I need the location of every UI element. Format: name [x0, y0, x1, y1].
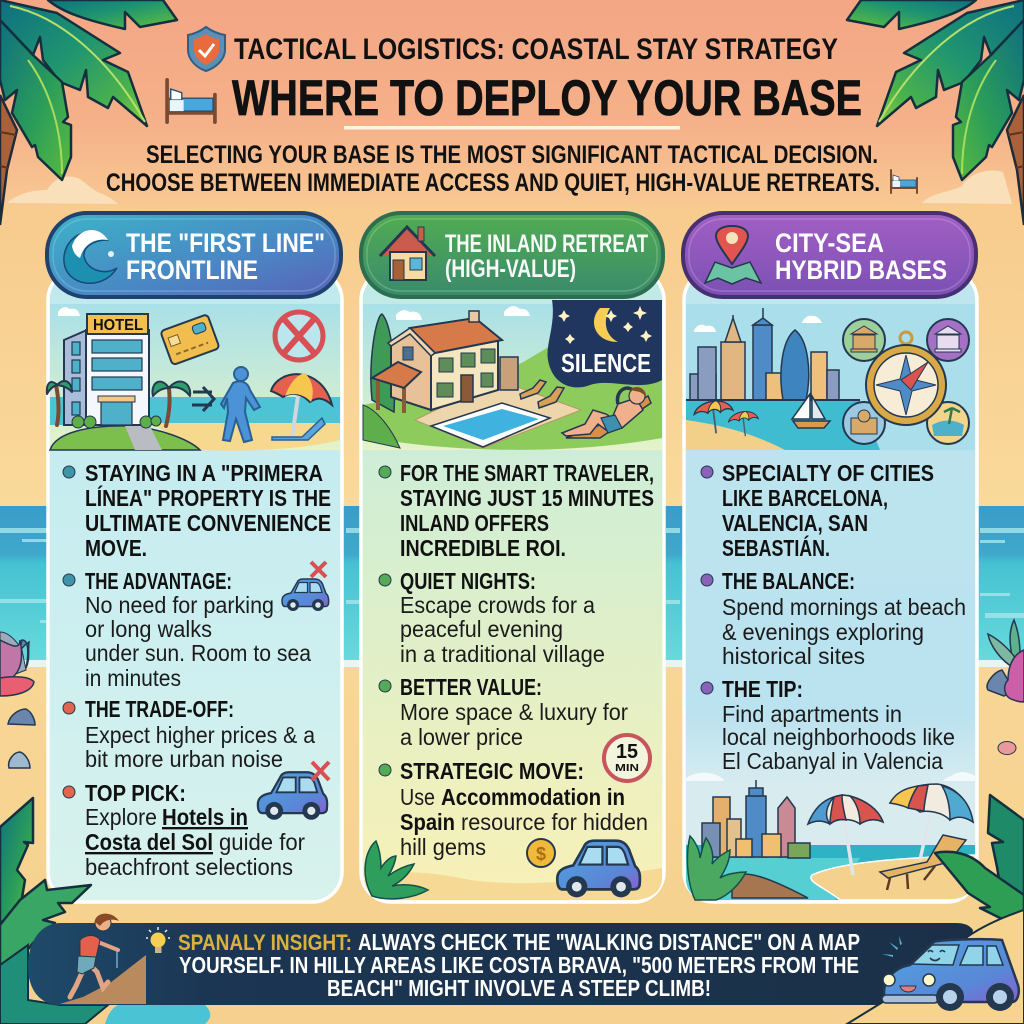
bullet: advantage: THE ADVANTAGE:	[85, 568, 232, 594]
bullet: trade-off	[63, 696, 316, 772]
bullet: balance: historical sites	[722, 643, 865, 669]
bullet: advantage	[63, 568, 312, 691]
bullet: strategic move: resource for hidden	[461, 809, 648, 835]
bullet: advantage: in minutes	[85, 665, 181, 691]
decoration: sand hill	[847, 910, 1024, 1024]
icon: light bulb	[146, 927, 170, 953]
illustration: hotel to beach: HOTEL	[93, 317, 143, 334]
icon: no sign	[275, 312, 323, 360]
beach umbrellas	[694, 401, 733, 433]
illustration: villa and pool	[363, 300, 662, 450]
icon: walking person	[221, 367, 260, 442]
bullets	[701, 460, 966, 774]
bullet: advantage: No need for parking	[85, 592, 274, 618]
icon: credit card	[160, 314, 220, 365]
pill title: CITY-SEA	[775, 228, 884, 258]
icon: 15 min badge: 15	[616, 741, 638, 763]
bullet: advantage: under sun. Room to sea	[85, 640, 312, 666]
pill header	[361, 213, 663, 297]
palm top-left	[0, 0, 177, 225]
subtitle	[106, 141, 880, 197]
icon: small bed	[891, 170, 917, 193]
pill header	[47, 213, 341, 297]
bullet: intro	[63, 460, 331, 561]
bullet: strategic move: Spain	[400, 809, 455, 835]
card body	[684, 270, 977, 902]
bullet: tip: El Cabanyal in Valencia	[722, 748, 944, 774]
icon: 15 min badge	[604, 735, 650, 781]
insight text	[178, 929, 860, 1001]
bullet: top pick: guide for	[219, 829, 305, 855]
bullet: intro: STAYING JUST 15 MINUTES	[400, 485, 654, 511]
background: sky	[0, 0, 1024, 205]
bullet: intro	[379, 460, 654, 561]
bullet: intro: VALENCIA, SAN	[722, 510, 868, 536]
bullet: balance: & evenings exploring	[722, 619, 924, 645]
pill title	[445, 230, 648, 283]
insight text: ALWAYS CHECK THE "WALKING DISTANCE" ON A MAP	[358, 929, 860, 955]
bullet: better value: BETTER VALUE:	[400, 674, 542, 700]
icon: shield	[188, 27, 225, 71]
bullet: balance: Spend mornings at beach	[722, 594, 966, 620]
icon: car with x	[258, 762, 329, 820]
illustration: sand, coin and car	[364, 839, 662, 900]
arrow	[192, 387, 214, 411]
decoration: water bottom left	[105, 1005, 210, 1024]
icon: beach umbrella	[271, 373, 332, 440]
bullet: tip: THE TIP:	[722, 676, 803, 702]
bullet: better value: a lower price	[400, 724, 523, 750]
clouds	[7, 171, 1012, 204]
bullet: balance	[701, 568, 966, 669]
lounge chairs	[520, 380, 564, 408]
pill title: THE "FIRST LINE"	[126, 228, 325, 258]
bullet: tip	[701, 676, 955, 774]
bullet: tip: local neighborhoods like	[722, 724, 955, 750]
insight text: SPANALY INSIGHT:	[178, 930, 352, 955]
night panel: silence	[547, 300, 662, 387]
bullet: quiet nights: in a traditional village	[400, 641, 605, 667]
background: sea	[0, 506, 1024, 668]
title underline	[344, 126, 680, 130]
bullet: trade-off: bit more urban noise	[85, 746, 283, 772]
bullet: tip: Find apartments in	[722, 701, 902, 727]
bullet: intro	[701, 460, 934, 561]
bullet: quiet nights: Escape crowds for a	[400, 592, 596, 618]
night panel: silence: SILENCE	[561, 348, 651, 378]
bullet: trade-off: Expect higher prices & a	[85, 722, 316, 748]
bullet: intro: INCREDIBLE ROI.	[400, 535, 566, 561]
bullet: intro: LÍNEA" PROPERTY IS THE	[85, 484, 331, 511]
pill title: (HIGH-VALUE)	[445, 255, 576, 283]
main title: WHERE TO DEPLOY YOUR BASE	[232, 70, 862, 126]
bullet: strategic move: hill gems	[400, 834, 486, 860]
decoration: leaves bottom left	[0, 798, 108, 1024]
pool	[431, 403, 550, 447]
villa	[372, 311, 518, 413]
icon: map pin	[705, 226, 761, 284]
icon: small car with x	[282, 562, 329, 611]
icon: climbing hiker	[60, 914, 146, 1004]
illustration: hotel to beach	[47, 304, 340, 451]
icon: smiling car	[882, 936, 1019, 1011]
bullet: better value: More space & luxury for	[400, 699, 628, 725]
bullet: better value	[379, 674, 628, 750]
header	[106, 27, 917, 197]
insight text: BEACH" MIGHT INVOLVE A STEEP CLIMB!	[327, 975, 711, 1001]
bullet: top pick: Explore	[85, 804, 157, 830]
bullet: intro: STAYING IN A "PRIMERA	[85, 460, 323, 486]
card body	[361, 270, 664, 902]
bullet: intro: INLAND OFFERS	[400, 510, 549, 536]
panel: inland retreat	[361, 213, 664, 902]
compass	[866, 332, 946, 425]
bullets	[63, 460, 331, 880]
palm top-right	[847, 0, 1024, 225]
pill title: THE INLAND RETREAT	[445, 230, 648, 258]
bullet: strategic move: Use	[400, 784, 435, 810]
banner: spanaly insight	[28, 910, 1024, 1024]
bullet: top pick: Hotels in	[162, 804, 248, 830]
bullet: quiet nights: peaceful evening	[400, 616, 563, 642]
illustration: beach scene	[686, 772, 975, 900]
bullet: strategic move: Accommodation in	[441, 784, 625, 810]
bullet: top pick: TOP PICK:	[85, 780, 186, 806]
illustration: skyline and compass	[686, 304, 975, 450]
pill title	[775, 228, 947, 285]
bullet: intro: SEBASTIÁN.	[722, 534, 830, 561]
city icons	[843, 319, 969, 444]
bullet: strategic move	[379, 758, 648, 860]
bullet: intro: ULTIMATE CONVENIENCE	[85, 510, 331, 536]
bullet: intro: LIKE BARCELONA,	[722, 485, 888, 511]
bullet: top pick: beachfront selections	[85, 854, 293, 880]
bullet: top pick	[63, 780, 305, 880]
panel: city-sea hybrid	[683, 213, 977, 902]
pill title: HYBRID BASES	[775, 255, 947, 285]
icon: house	[380, 227, 435, 280]
bullet: intro: SPECIALTY OF CITIES	[722, 460, 934, 486]
bullet: advantage: or long walks	[85, 616, 212, 642]
bullet: intro: MOVE.	[85, 535, 147, 561]
title kicker: TACTICAL LOGISTICS: COASTAL STAY STRATEGY	[234, 33, 838, 66]
pill title: FRONTLINE	[126, 255, 258, 285]
icon: relaxing man	[562, 387, 651, 438]
bullet: trade-off: THE TRADE-OFF:	[85, 696, 234, 722]
icon: bed	[167, 80, 215, 122]
bullet: quiet nights	[379, 568, 605, 667]
decoration: leaves bottom right	[935, 795, 1024, 920]
decoration: coral right	[987, 620, 1024, 754]
bullet: quiet nights: QUIET NIGHTS:	[400, 568, 536, 594]
background: sand	[0, 667, 1024, 1024]
pill header	[683, 213, 976, 297]
insight text: YOURSELF. IN HILLY AREAS LIKE COSTA BRAVA, "500 METERS FROM THE	[179, 952, 859, 978]
panel: first line frontline	[47, 213, 342, 902]
icon: 15 min badge: MIN	[615, 763, 639, 774]
background: lower sky	[0, 205, 1024, 506]
illustration: sand, coin and car: $	[536, 844, 546, 864]
pill title	[126, 228, 325, 285]
icon: wave	[64, 230, 117, 283]
bullet: balance: THE BALANCE:	[722, 568, 855, 594]
bullets	[379, 460, 654, 860]
decoration: coral left	[0, 632, 35, 768]
bullet: strategic move: STRATEGIC MOVE:	[400, 758, 584, 784]
card body	[48, 270, 342, 902]
boat	[792, 394, 830, 428]
bullet: intro: FOR THE SMART TRAVELER,	[400, 460, 654, 486]
subtitle: SELECTING YOUR BASE IS THE MOST SIGNIFICANT TACTICAL DECISION.	[146, 141, 878, 169]
bullet: top pick: Costa del Sol	[85, 829, 213, 855]
